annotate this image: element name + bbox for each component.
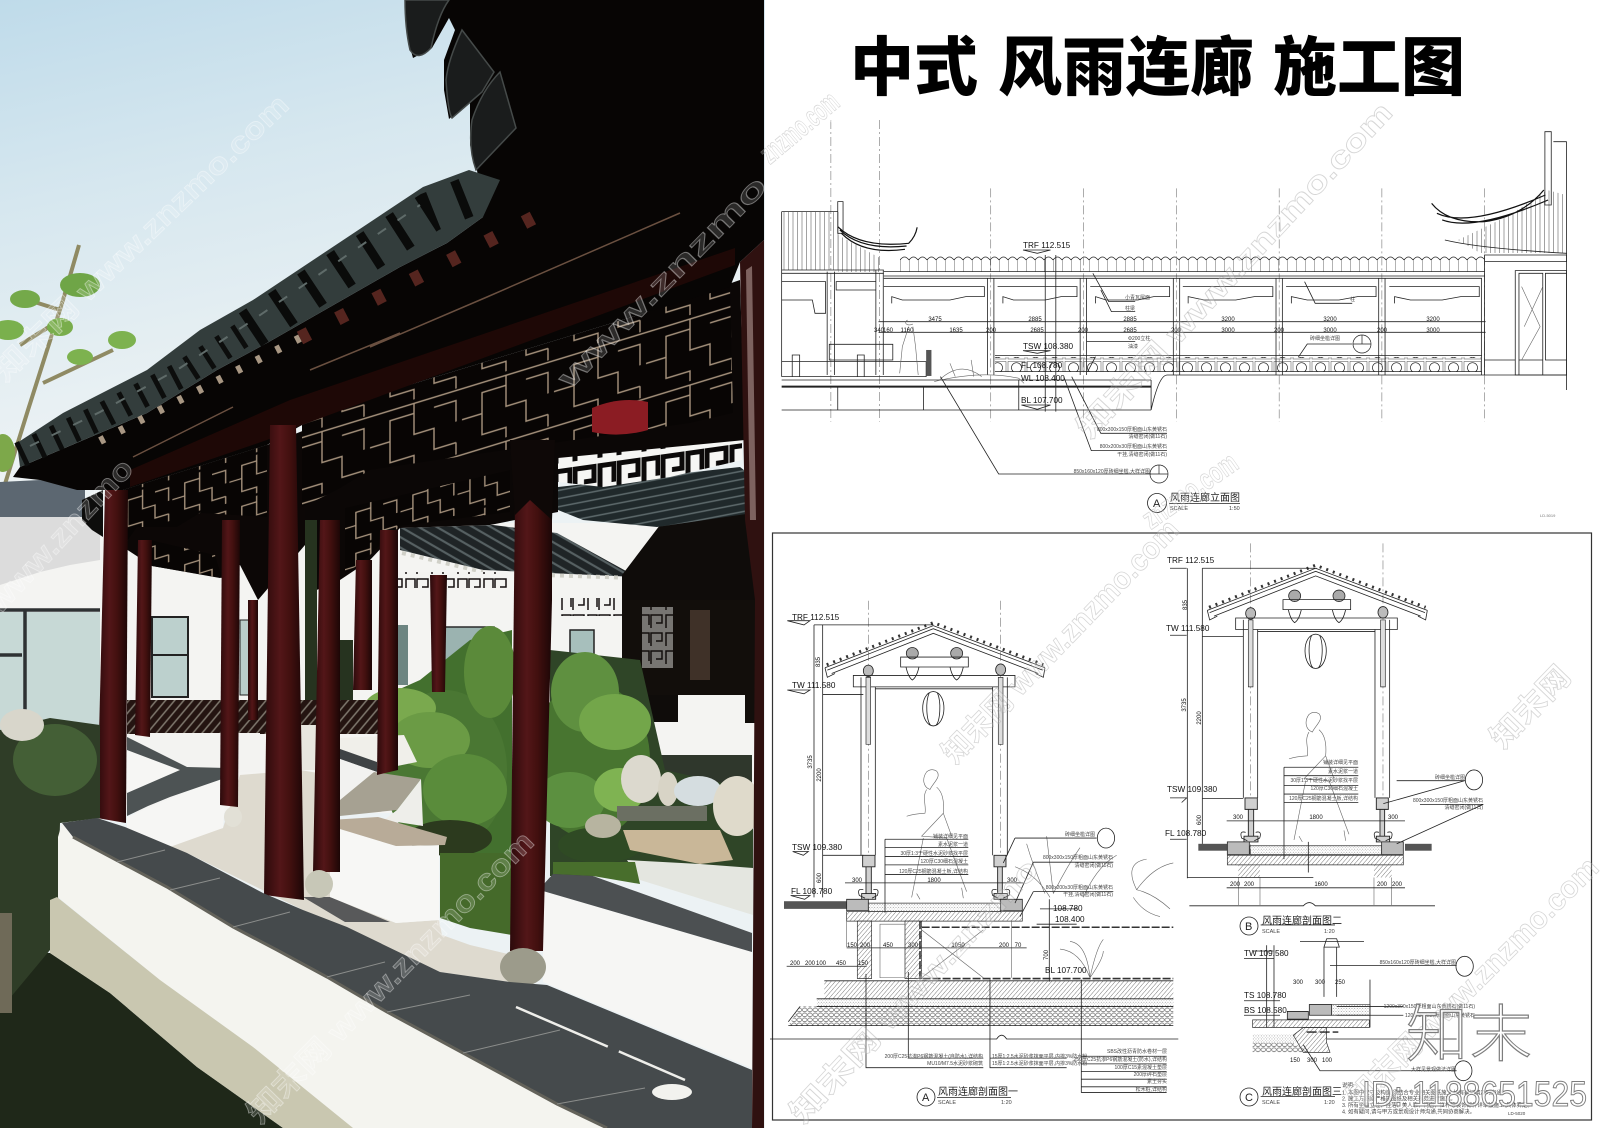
shrub right of centre <box>546 652 651 833</box>
cap joints <box>117 850 645 1104</box>
elevation drawing title <box>1148 491 1240 512</box>
section one dimensions: 835 <box>816 656 822 667</box>
section two pavilion <box>1207 543 1427 855</box>
section one notes: 15厚1:2.5水泥砂浆抹面平层,内掺3%防水粉 <box>992 1060 1087 1067</box>
distant roof middle <box>400 525 637 577</box>
ground <box>0 950 283 1128</box>
corridor ceiling dark left <box>123 430 305 600</box>
general notes <box>1342 1081 1533 1116</box>
section three dimensions: 300 <box>1307 1058 1318 1064</box>
section one levels: BL 107.700 <box>1045 966 1087 975</box>
section three drawing title: C <box>1245 1092 1253 1104</box>
section one pavilion <box>825 601 1045 913</box>
section one notes: 30厚1:3干硬性水泥砂浆找平层 <box>900 850 968 857</box>
section one levels: FL 108.780 <box>791 887 833 896</box>
section one dimensions: 200 <box>999 943 1010 949</box>
section one drawing title: SCALE <box>938 1100 956 1106</box>
elevation dimensions: 2685 <box>1030 328 1044 334</box>
section two dimensions: 300 <box>1388 815 1399 821</box>
section three notes: 1200x300x30厚粗面山东黄锈石 <box>1405 1012 1475 1019</box>
right low wall cap <box>542 874 752 952</box>
cap sun streak <box>516 1007 685 1080</box>
elevation dimensions: 3000 <box>1221 328 1235 334</box>
back lattice right <box>345 470 510 575</box>
sections frame <box>772 533 1592 1120</box>
section one notes: 干挂,清缝密闭(做11石) <box>1063 891 1113 898</box>
red lantern <box>592 400 648 435</box>
section two notes: 砖细坐槛详图 <box>1435 774 1465 781</box>
further low wall cap <box>340 772 421 816</box>
section one dimensions: 200 <box>805 961 816 967</box>
corridor ceiling dark right <box>305 280 745 595</box>
section one grass <box>784 901 847 909</box>
section two dimensions: 200 <box>1392 882 1403 888</box>
watermarks: 知末网 www.znzmo.com <box>936 513 1186 770</box>
section one notes: 250厚C25抗渗P6钢筋混凝土(防水),详结构 <box>1074 1056 1167 1063</box>
base of second column <box>305 870 333 898</box>
left bush <box>0 709 100 1013</box>
elevation dimensions: 2885 <box>1028 317 1042 323</box>
elevation annotations: 850x160x120厚砖细坐槛,大样详图 <box>1074 468 1150 475</box>
photo: covered corridor with red columns <box>0 0 765 1128</box>
section two notes: 120厚C25钢筋混凝土板,详结构 <box>1289 795 1358 802</box>
section one dimensions: 1800 <box>927 878 941 884</box>
section two drawing title: 风雨连廊剖面图二 <box>1262 914 1342 927</box>
sheet number elevation: LD-5019 <box>1540 513 1556 518</box>
elevation dimensions: 3000 <box>1323 328 1337 334</box>
section one notes: 800x200x30厚粗面山东黄锈石 <box>1046 884 1113 891</box>
section three post and layers <box>1244 939 1473 1081</box>
section three levels: TS 108.780 <box>1244 991 1287 1000</box>
section one notes: MU10/M7.5水泥砂浆砌筑 <box>927 1060 983 1067</box>
section two bubble <box>1465 770 1483 790</box>
capital right front <box>510 440 555 520</box>
section one levels: TW 111.580 <box>792 681 836 690</box>
section one notes: 120厚C30细石混凝土 <box>920 858 968 865</box>
section one dimensions: 70 <box>1015 943 1022 949</box>
elevation level labels: FL 108.780 <box>1021 361 1063 370</box>
section two levels: TRF 112.515 <box>1167 556 1215 565</box>
shrub backing left <box>402 630 512 853</box>
section three notes: 850x160x120厚砖细坐槛,大样详图 <box>1380 959 1456 966</box>
section one notes: 铺装详细见平面 <box>933 833 968 840</box>
front wall stone base <box>50 897 353 1128</box>
section one notes: 素土夯实 <box>1147 1078 1167 1085</box>
white buildings behind <box>0 523 764 813</box>
section one notes: 100厚C15素混凝土垫层 <box>1114 1064 1167 1071</box>
elevation dimensions: 200 <box>1171 328 1182 334</box>
elevation level labels: BL 107.700 <box>1021 396 1063 405</box>
grey wall band <box>0 480 85 517</box>
section one levels <box>791 613 1087 975</box>
elevation drawing title: 1:50 <box>1229 506 1240 512</box>
title <box>850 17 1465 109</box>
logo watermark: 知末 <box>1406 984 1532 1074</box>
windows <box>0 608 595 730</box>
section three drawing title: 1:20 <box>1324 1100 1335 1106</box>
beam highlight lines <box>133 213 680 457</box>
base right column <box>500 948 546 986</box>
section one linework <box>770 601 1178 1093</box>
watermarks: www.znzmo.com <box>550 86 855 396</box>
watermarks: 知末网 www.znzmo.com <box>241 825 541 1130</box>
section one notes: 200厚C25抗渗P6钢筋混凝土(自防水),详结构 <box>885 1053 983 1060</box>
drawing: section one <box>770 601 1178 1106</box>
section three levels <box>1244 949 1289 1015</box>
general notes: 2. 施工方必须严格按图纸及相关规范进行施工。 <box>1342 1094 1456 1102</box>
elevation drawing title: SCALE <box>1170 506 1188 512</box>
section one plants <box>1015 836 1173 978</box>
shrub left of centre <box>364 626 516 856</box>
section two levels <box>1165 556 1218 838</box>
tile gaps right <box>250 190 485 330</box>
section three dimensions: 300 <box>1315 980 1326 986</box>
front wall white face <box>58 823 607 1128</box>
elevation dimensions: 160 <box>883 328 894 334</box>
far right column <box>740 240 764 1128</box>
centre low wall face <box>330 826 439 923</box>
section one dimensions: 150 <box>847 943 858 949</box>
section one dimensions: 2200 <box>817 768 823 782</box>
shadow on white wall <box>0 517 100 585</box>
section one notes: 砖细坐槛详图 <box>1065 831 1095 838</box>
section one dimensions: 450 <box>883 943 894 949</box>
elevation level labels: TSW 108.380 <box>1023 342 1074 351</box>
rafter ends tan <box>100 338 300 441</box>
section one dimensions: 200 <box>860 943 871 949</box>
section one dimensions: 600 <box>817 872 823 883</box>
elevation annotations: 800x300x150厚粗面山东黄锈石 <box>1097 426 1167 433</box>
section one levels: 108.780 <box>1053 904 1083 913</box>
section one dimensions: 300 <box>852 878 863 884</box>
section two notes: 清缝密闭(做11石) <box>1444 804 1483 811</box>
section one dimensions: 100 <box>816 961 827 967</box>
distant roof eave ends <box>402 553 633 578</box>
back white floor and walls <box>150 725 417 772</box>
section two notes: 800x300x150厚粗面山东黄锈石 <box>1413 797 1483 804</box>
low wall left cap <box>127 737 227 816</box>
general notes: 3. 所有坐槛立柱、挂落、美人靠、门窗、栏杆等装饰部件详单独施工,具体界定。 <box>1342 1101 1533 1109</box>
general notes: 1. 本图中尺寸及构造,须结合专业相关图纸施工,如有疑问请及时沟通。 <box>1342 1088 1507 1096</box>
base of back column <box>224 807 242 827</box>
section one drawing title: A <box>922 1092 930 1104</box>
elevation dimensions: 200 <box>986 328 997 334</box>
watermarks: 知末网 www.znzmo.com <box>1342 851 1600 1115</box>
section one notes: 素水泥浆一道 <box>938 841 968 848</box>
section two notes: 120厚C30细石混凝土 <box>1310 785 1358 792</box>
section one levels: 108.400 <box>1055 915 1085 924</box>
section two levels: TSW 109.380 <box>1167 785 1218 794</box>
column right front <box>510 500 552 951</box>
left lattice <box>124 445 267 528</box>
section one dimensions: 300 <box>1007 878 1018 884</box>
general notes: 说明: <box>1342 1081 1354 1089</box>
title: 施工图 <box>1273 17 1465 109</box>
column centre <box>264 425 304 900</box>
elevation dimensions: 3200 <box>1323 317 1337 323</box>
lawn left <box>440 853 512 935</box>
section two dimensions: 600 <box>1197 814 1203 825</box>
upper rafters <box>405 0 516 170</box>
right low wall face <box>543 891 752 1068</box>
elevation dimensions: 2685 <box>1123 328 1137 334</box>
elevation dimensions: 2885 <box>1123 317 1137 323</box>
watermarks: znzmo.com <box>1136 446 1244 536</box>
elevation annotations: 小青瓦屋面 <box>1125 294 1150 301</box>
section one notes: 15厚1:2.5水泥砂浆抹面平层,内掺3%防水粉 <box>992 1053 1087 1060</box>
section one notes: 200厚碎石垫层 <box>1134 1071 1167 1078</box>
white gap with fret silhouette <box>558 440 742 487</box>
section two drawing title <box>1240 914 1342 935</box>
pebble stream <box>627 860 753 915</box>
section two drawing title: 1:20 <box>1324 929 1335 935</box>
elevation linework <box>782 120 1567 474</box>
section three levels: TW 109.580 <box>1244 949 1289 958</box>
tile highlights <box>30 205 420 446</box>
section one walls <box>847 921 1012 979</box>
elevation dimensions: 200 <box>1274 328 1285 334</box>
centre low wall cap <box>330 817 447 846</box>
elevation annotations: 油漆 <box>1128 343 1138 350</box>
roof tile band <box>17 170 500 467</box>
section three notes: 大样见景观做法详图 <box>1411 1066 1456 1073</box>
section one drawing title <box>917 1085 1018 1106</box>
elevation annotations: 柱梁 <box>1125 305 1135 312</box>
further low wall face <box>384 779 423 826</box>
sun spot <box>652 1084 692 1100</box>
column left front <box>97 490 128 823</box>
garden backing dark <box>550 650 753 880</box>
section two linework <box>1170 543 1483 1096</box>
section three drawing title <box>1240 1085 1342 1106</box>
elevation dimensions: 3475 <box>928 317 942 323</box>
drawing: corridor elevation <box>782 120 1567 513</box>
tree branches and leaves <box>0 245 136 500</box>
elevation dimensions: 3200 <box>1426 317 1440 323</box>
elevation level labels <box>1021 241 1074 405</box>
section three dimensions <box>1290 980 1346 1064</box>
section two dimensions: 2200 <box>1197 711 1203 725</box>
section one dimensions: 700 <box>1044 949 1050 960</box>
section one dimensions: 200 <box>790 961 801 967</box>
section two notes: 铺装详细见平面 <box>1323 759 1358 766</box>
section two dimensions: 300 <box>1233 815 1244 821</box>
distant pavilion dark <box>622 510 755 807</box>
elevation drawing title: A <box>1153 498 1161 510</box>
pond rocks <box>585 755 761 838</box>
back columns <box>135 520 447 807</box>
section one water line <box>920 921 1173 979</box>
section one dimensions: 3735 <box>808 755 814 769</box>
section two notes: 素水泥浆一道 <box>1328 768 1358 775</box>
section one notes: 清缝密闭(做11石) <box>1074 862 1113 869</box>
section three dimensions: 100 <box>1322 1058 1333 1064</box>
cap front edge <box>73 837 607 1128</box>
section three dimensions: 150 <box>1290 1058 1301 1064</box>
section two dimensions: 3735 <box>1182 698 1188 712</box>
section two notes <box>1289 759 1483 811</box>
elevation dimensions: 340 <box>874 328 885 334</box>
roof underside dark mass <box>13 0 764 490</box>
elevation annotations <box>1074 294 1355 475</box>
elevation level labels: WL 108.400 <box>1021 374 1065 383</box>
back railing <box>127 700 382 734</box>
section two dimensions: 200 <box>1230 882 1241 888</box>
section two notes: 30厚1:3干硬性水泥砂浆找平层 <box>1290 777 1358 784</box>
section three dimensions: 300 <box>1293 980 1304 986</box>
section two levels: FL 108.780 <box>1165 829 1207 838</box>
distant lattice fringes <box>398 572 622 616</box>
section two dims and leaders <box>1170 568 1483 888</box>
section two ground <box>1189 842 1435 906</box>
elevation dimensions: 3200 <box>1221 317 1235 323</box>
elevation hatch fills <box>782 190 1566 372</box>
section two dimensions <box>1182 599 1403 888</box>
section one dimensions: 1050 <box>951 943 965 949</box>
section one notes <box>885 831 1167 1093</box>
main lattice <box>302 287 733 507</box>
watermarks: 知末网 www.znzmo.com <box>1071 96 1399 445</box>
back lattice left <box>152 545 222 578</box>
section two dimensions: 200 <box>1377 882 1388 888</box>
detail bubbles <box>1150 335 1371 483</box>
elevation dimensions: 1635 <box>949 328 963 334</box>
walkway floor <box>150 770 512 982</box>
section one notes: 800x300x150厚粗面山东黄锈石 <box>1043 854 1113 861</box>
section two dimensions: 1600 <box>1314 882 1328 888</box>
eave corner ornament <box>82 490 103 537</box>
distant roof right <box>558 467 753 527</box>
section two drawing title: SCALE <box>1262 929 1280 935</box>
rafter ends red <box>300 204 560 338</box>
watermarks: 知末网 www.znzmo <box>784 853 1045 1130</box>
elevation dimensions <box>874 317 1440 334</box>
section one notes: SBS改性沥青防水卷材一层 <box>1107 1048 1167 1055</box>
elevation dimensions: 1160 <box>901 328 914 334</box>
section one foundation <box>770 981 1178 1039</box>
section one levels: TSW 109.380 <box>792 843 843 852</box>
elevation annotations: 800x200x30厚粗面山东黄锈石 <box>1100 443 1167 450</box>
general notes: 4. 如有疑问,请与甲方或景观设计师沟通,共同协商解决。 <box>1342 1108 1475 1116</box>
section one bubble <box>1097 828 1115 848</box>
elevation annotations: 砖细坐槛详图 <box>1310 335 1340 342</box>
watermarks: znzmo.com <box>753 85 846 170</box>
background dark green behind columns <box>305 520 353 700</box>
section one dimensions: 450 <box>836 961 847 967</box>
section two drawing title: B <box>1245 921 1252 933</box>
far right column highlight <box>746 266 756 520</box>
elevation dimensions: 3000 <box>1426 328 1440 334</box>
elevation dimensions: 200 <box>1377 328 1388 334</box>
section one slab <box>847 899 1022 921</box>
elevation annotations: Φ200立柱 <box>1128 335 1150 342</box>
section two dimensions: 1800 <box>1309 815 1323 821</box>
stream stone slab <box>623 830 733 864</box>
column second <box>313 520 340 872</box>
section one drawing title: 风雨连廊剖面图一 <box>938 1085 1018 1098</box>
section three notes <box>1380 959 1475 1073</box>
title: 风雨连廊 <box>998 17 1254 109</box>
section two title line <box>1261 925 1335 1096</box>
section one dimensions: 150 <box>858 961 869 967</box>
section one dimension and leader lines <box>787 621 1167 1093</box>
section three levels: BS 108.580 <box>1244 1006 1287 1015</box>
lawn right <box>553 862 640 884</box>
section three drawing title: SCALE <box>1262 1100 1280 1106</box>
section one levels: TRF 112.515 <box>792 613 840 622</box>
floor shadow <box>303 897 390 922</box>
section one notes: 松木桩,详结构 <box>1136 1086 1167 1093</box>
front wall stone cap <box>62 818 752 1128</box>
tile gaps left <box>20 330 250 455</box>
elevation drawing title: 风雨连廊立面图 <box>1170 491 1240 504</box>
section one notes: 120厚C25钢筋混凝土板,详结构 <box>899 868 968 875</box>
section one dimensions <box>790 656 1050 967</box>
section one dimensions: 300 <box>908 943 919 949</box>
section three dimensions: 250 <box>1335 980 1346 986</box>
drawing: section two <box>1165 543 1483 1096</box>
elevation annotations: 清缝密闭(做11石) <box>1128 433 1167 440</box>
section two dimensions: 200 <box>1244 882 1255 888</box>
drawing: section three <box>1240 949 1475 1106</box>
dark red fascia <box>130 248 735 487</box>
general notes: LD-5020 <box>1508 1111 1526 1116</box>
watermarks: 知末网 <box>1484 660 1578 755</box>
section two dimensions: 835 <box>1183 599 1189 610</box>
elevation annotations: 柱 <box>1350 296 1355 303</box>
section three drawing title: 风雨连廊剖面图三 <box>1262 1085 1342 1098</box>
sky <box>0 0 765 1128</box>
low wall left white <box>127 813 224 846</box>
section two levels: TW 111.580 <box>1166 624 1210 633</box>
section three notes: 1200x300x150厚粗面山东黄锈石(做11石) <box>1384 1003 1475 1010</box>
title: 中式 <box>850 17 978 109</box>
elevation level labels: TRF 112.515 <box>1023 241 1071 250</box>
section one drawing title: 1:20 <box>1001 1100 1012 1106</box>
elevation dimensions: 200 <box>1078 328 1089 334</box>
elevation annotations: 干挂,清缝密闭(做11石) <box>1117 451 1167 458</box>
